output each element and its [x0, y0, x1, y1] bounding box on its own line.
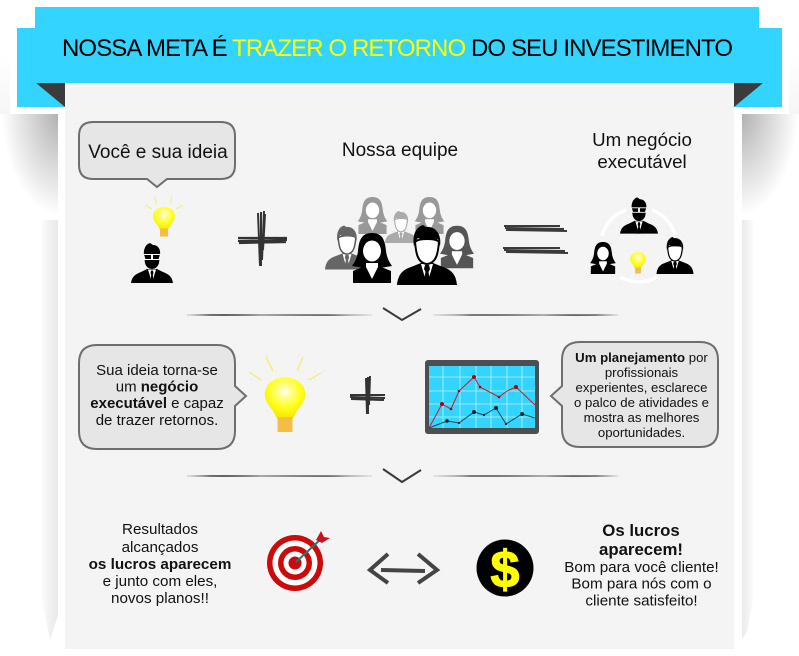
- callout: sua ideia: de trazer retornos.: [96, 412, 218, 429]
- callout: sua ideia: [79, 345, 246, 449]
- icon: team with idea: [590, 197, 694, 282]
- callout: planejamento: o palco de atividades e: [574, 395, 709, 410]
- callout: sua ideia: um negócio: [116, 378, 198, 396]
- text: resultados: alcançados: [122, 539, 199, 556]
- panel: sheet background: [58, 83, 742, 656]
- text: resultados: [89, 521, 231, 607]
- red line: [429, 375, 535, 428]
- dark line: [429, 406, 535, 428]
- heading: um negócio executável: executável: [597, 151, 687, 172]
- text: os lucros aparecem: cliente satisfeito!: [585, 592, 698, 610]
- icon: large bulb: [249, 357, 321, 432]
- icon: dollar coin: [476, 540, 534, 599]
- text: os lucros aparecem: Bom para nós com o: [571, 576, 712, 592]
- divider 2: [187, 469, 618, 482]
- text: os lucros aparecem: [564, 521, 719, 610]
- callout: você e sua ideia: [79, 122, 235, 187]
- callout: sua ideia: executável e capaz: [90, 395, 224, 412]
- title banner: [17, 7, 782, 107]
- icon: target: [267, 531, 330, 591]
- callout: planejamento: profissionais: [605, 365, 679, 380]
- arrow: chevron down: [383, 469, 421, 482]
- title: NOSSA META É TRAZER O RETORNO DO SEU INVESTIMENTO: [62, 35, 733, 62]
- icon: plus: [350, 376, 385, 414]
- arrow: chevron down: [383, 308, 421, 320]
- callout: sua ideia: Sua ideia torna-se: [96, 362, 218, 379]
- heading: um negócio executável: [592, 129, 692, 172]
- icon: equals: [503, 226, 568, 253]
- callout: planejamento: experientes, esclarece: [576, 380, 707, 395]
- callout: você e sua ideia: Você e sua ideia: [88, 142, 228, 163]
- text: os lucros aparecem: aparecem!: [599, 540, 683, 559]
- icon: team group: [325, 197, 474, 285]
- icon: plus: [238, 211, 287, 266]
- callout: planejamento: mostra as melhores: [584, 410, 700, 425]
- text: os lucros aparecem: Bom para você cliente!: [564, 559, 719, 576]
- icon: small bulb: [145, 197, 183, 236]
- callout: planejamento: Um planejamento por: [575, 350, 708, 365]
- icon: person with glasses: [131, 243, 173, 283]
- text: resultados: e junto com eles,: [103, 573, 217, 590]
- text: os lucros aparecem: Os lucros: [602, 521, 680, 540]
- arrow: double-headed: [370, 554, 437, 583]
- heading: um negócio executável: Um negócio: [592, 129, 692, 150]
- text: resultados: Resultados: [122, 521, 198, 538]
- text: resultados: novos planos!!: [111, 590, 209, 607]
- text: resultados: os lucros aparecem: [89, 556, 231, 573]
- heading: nossa equipe: Nossa equipe: [342, 140, 458, 161]
- chart: monitor: [425, 360, 539, 434]
- callout: planejamento: [551, 342, 718, 447]
- divider 1: [187, 308, 618, 320]
- callout: planejamento: oportunidades.: [598, 425, 685, 440]
- icon: dollar coin: $: [491, 541, 520, 599]
